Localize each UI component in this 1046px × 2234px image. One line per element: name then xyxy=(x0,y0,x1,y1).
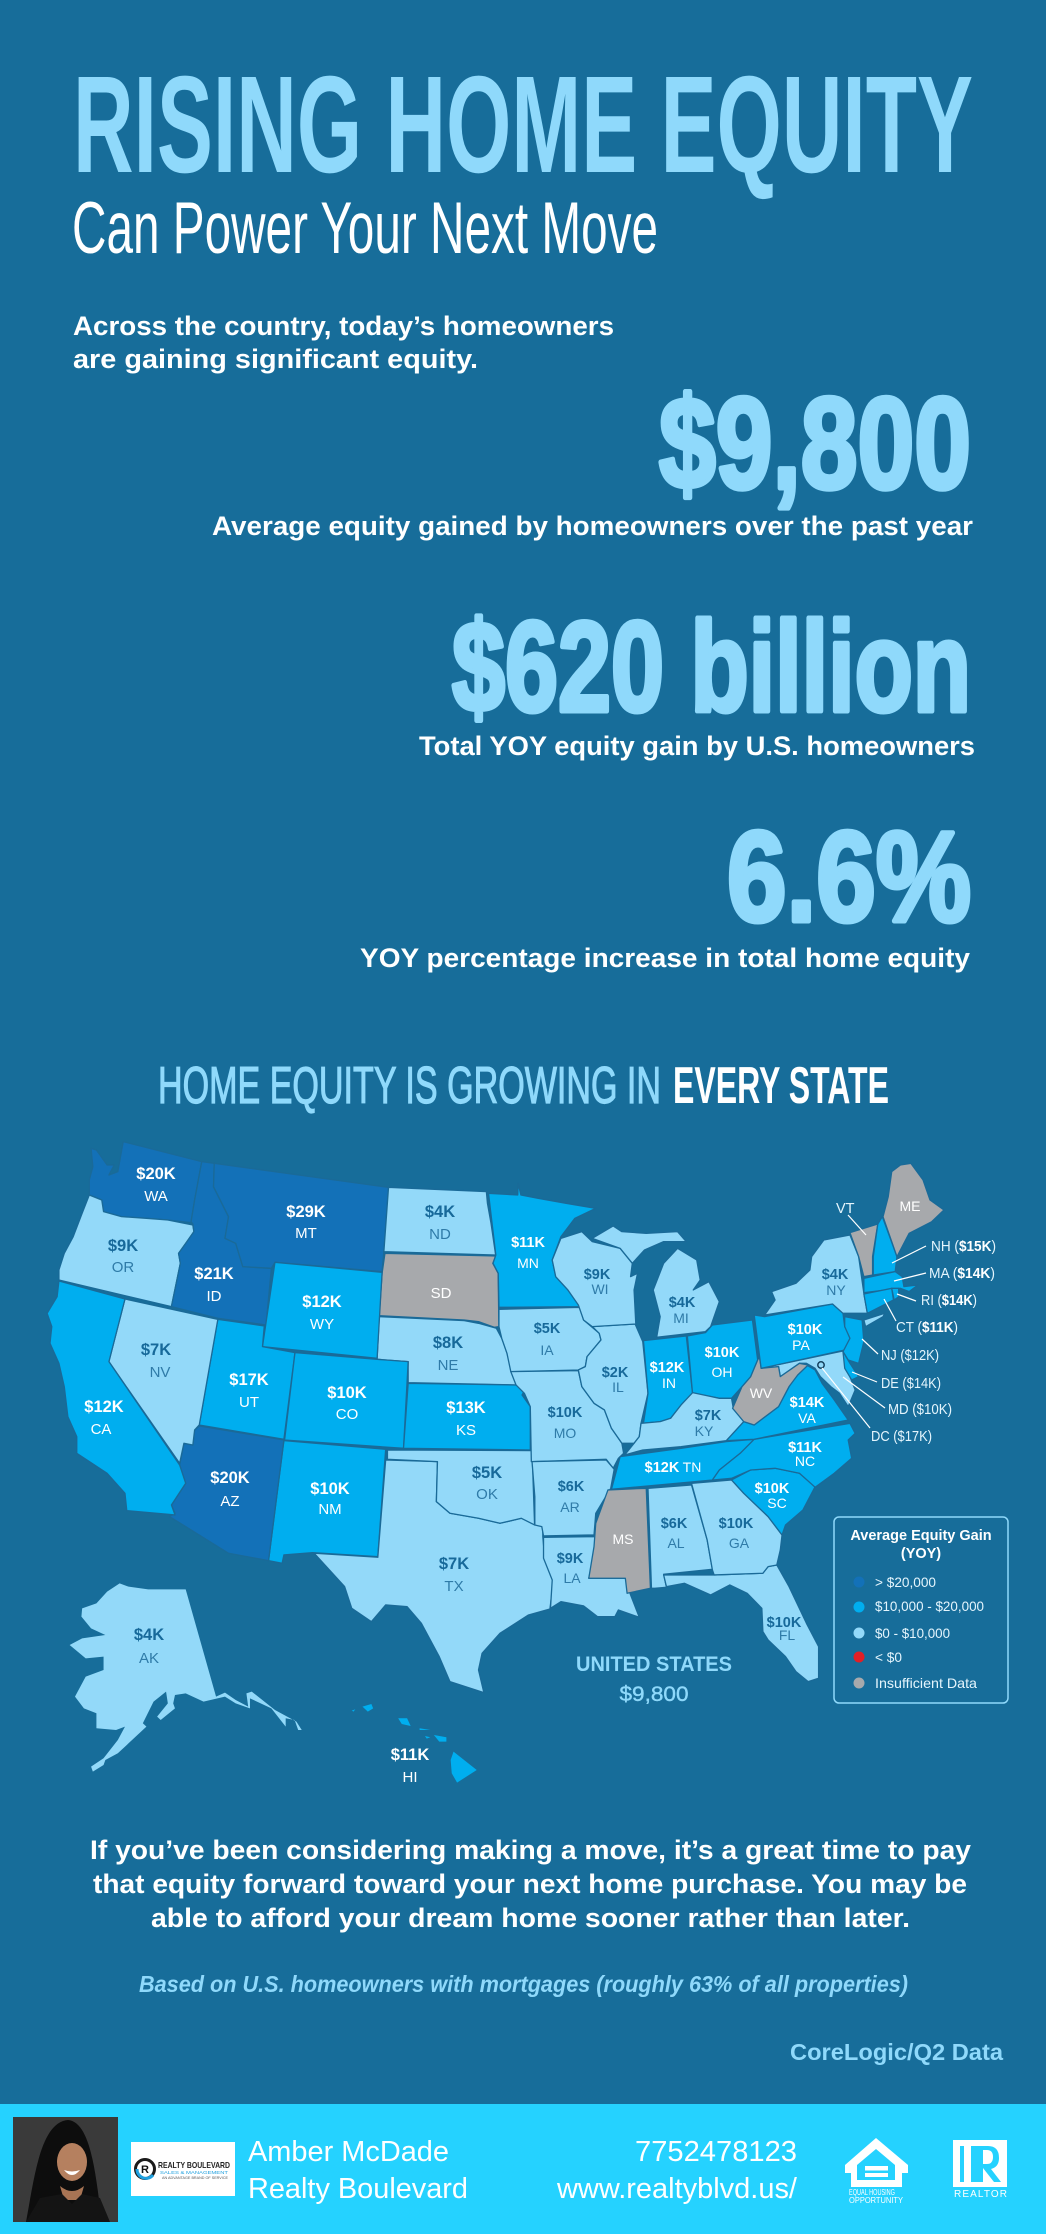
state: VA xyxy=(726,1365,848,1441)
state: WV xyxy=(733,1357,808,1425)
state: MT xyxy=(214,1163,389,1272)
state: AK: AK xyxy=(139,1650,159,1667)
state: OH: OH xyxy=(712,1364,732,1380)
Northeast callout leaders and labels xyxy=(822,1201,996,1445)
source: CoreLogic/Q2 Data xyxy=(790,2039,1003,2065)
agent name and company: Amber McDade xyxy=(248,2136,449,2168)
agent name and company xyxy=(248,2136,468,2205)
state: NE: NE xyxy=(438,1357,458,1374)
phone and website xyxy=(556,2136,798,2205)
Northeast callout leaders and labels: NH ($15K) xyxy=(931,1239,996,1255)
legend: < $0 xyxy=(875,1649,902,1665)
state: AL: AL xyxy=(667,1535,685,1551)
Northeast callout leaders and labels: DE ($14K) xyxy=(881,1376,941,1392)
Northeast callout leaders and labels: CT ($11K) xyxy=(896,1320,958,1336)
state: TN xyxy=(611,1439,754,1489)
state: LA xyxy=(544,1537,639,1617)
state: CA: $12K xyxy=(84,1398,124,1416)
state: NM xyxy=(269,1441,386,1563)
state: MO: $10K xyxy=(548,1405,583,1421)
state: SD xyxy=(379,1253,499,1327)
Northeast callout leaders and labels: NJ ($12K) xyxy=(881,1348,939,1364)
state: WA xyxy=(89,1142,202,1223)
state: UT xyxy=(199,1319,295,1439)
state: TX: $7K xyxy=(439,1555,469,1573)
state: AK xyxy=(70,1583,302,1772)
state: PA: PA xyxy=(792,1337,810,1353)
state: OK: $5K xyxy=(472,1464,502,1482)
state: MA xyxy=(864,1272,918,1293)
state: NH xyxy=(873,1217,897,1275)
state: IN: IN xyxy=(662,1375,676,1391)
state: NY: NY xyxy=(826,1282,846,1298)
state: FL: $10K xyxy=(767,1615,802,1631)
state: NE: $8K xyxy=(433,1334,463,1352)
state: MI xyxy=(592,1226,719,1337)
Northeast callout leaders and labels: MD ($10K) xyxy=(888,1402,952,1418)
state: AL xyxy=(648,1485,712,1588)
US choropleth map xyxy=(47,1142,996,1786)
state: SC: $10K xyxy=(755,1481,790,1497)
state: ND: $4K xyxy=(425,1203,455,1221)
national total: $9,800 xyxy=(620,1683,688,1706)
state: HI: HI xyxy=(402,1769,418,1786)
state: TN: TN xyxy=(683,1459,701,1475)
state: IL xyxy=(578,1324,648,1443)
closing paragraph: that equity forward toward your next home purchase. You may be xyxy=(93,1869,967,1899)
state: SD: SD xyxy=(431,1285,452,1302)
state: KS: $13K xyxy=(446,1399,486,1417)
state: MO: MO xyxy=(554,1425,576,1441)
company logo: REALTY BOULEVARD xyxy=(158,2160,230,2170)
map heading: HOME EQUITY IS GROWING IN xyxy=(158,1057,661,1115)
icon: realtor R xyxy=(953,2140,1007,2200)
map heading: EVERY STATE xyxy=(673,1057,889,1115)
state: MD xyxy=(761,1351,855,1407)
state: OK: OK xyxy=(476,1486,498,1503)
state: WY xyxy=(262,1262,382,1358)
intro text: Across the country, today’s homeowners xyxy=(73,311,614,341)
state: AR: $6K xyxy=(558,1479,585,1495)
icon: equal housing opportunity: OPPORTUNITY xyxy=(849,2196,904,2205)
state: OR xyxy=(59,1195,194,1307)
state: KY: $7K xyxy=(695,1408,722,1424)
icon: realtor R: REALTOR xyxy=(954,2189,1007,2200)
state: IN xyxy=(643,1336,693,1423)
state: IA: $5K xyxy=(534,1321,561,1337)
state: NC: $11K xyxy=(788,1440,822,1456)
legend: > $20,000 xyxy=(875,1574,936,1590)
state: NY: $4K xyxy=(822,1267,849,1283)
state: AZ: $20K xyxy=(210,1469,250,1487)
state: HI: $11K xyxy=(391,1746,429,1764)
state: MN: MN xyxy=(517,1255,539,1271)
stat: $9,800: $9,800 xyxy=(659,370,971,516)
state: FL xyxy=(664,1565,819,1682)
state: OH xyxy=(687,1320,758,1398)
state: MI: $4K xyxy=(669,1295,696,1311)
company logo: SALES & MANAGEMENT xyxy=(160,2170,228,2175)
state: UT: $17K xyxy=(229,1371,269,1389)
state: NM: $10K xyxy=(310,1480,350,1498)
DC marker xyxy=(818,1362,824,1368)
state: ME xyxy=(883,1163,944,1257)
state: CT xyxy=(864,1288,893,1313)
state: IA xyxy=(499,1307,601,1372)
company logo xyxy=(131,2142,235,2196)
legend: (YOY) xyxy=(901,1546,941,1562)
state: WI: $9K xyxy=(584,1267,611,1283)
stat: $620 billion: Total YOY equity gain by U.S. homeowners xyxy=(419,731,975,761)
state: WI xyxy=(552,1232,638,1327)
national total xyxy=(576,1653,732,1706)
state: GA xyxy=(692,1480,782,1575)
stat: $9,800 xyxy=(212,370,974,541)
state: OR: $9K xyxy=(108,1237,138,1255)
state: FL: FL xyxy=(779,1627,795,1643)
state: NV xyxy=(109,1299,218,1463)
state: KS: KS xyxy=(456,1422,476,1439)
state: MT: $29K xyxy=(286,1203,326,1221)
state: RI xyxy=(892,1288,899,1300)
state: CA: CA xyxy=(91,1421,111,1438)
state: CO: $10K xyxy=(327,1384,367,1402)
state: MI: MI xyxy=(673,1310,689,1326)
state: SC: SC xyxy=(767,1495,787,1511)
Northeast callout leaders and labels: DC ($17K) xyxy=(871,1429,932,1445)
Northeast callout leaders and labels: RI ($14K) xyxy=(921,1293,977,1309)
state: DE xyxy=(843,1352,859,1380)
state: WA: $20K xyxy=(136,1165,176,1183)
state: ID: $21K xyxy=(194,1265,234,1283)
state: VA: VA xyxy=(798,1410,816,1426)
state: AR: AR xyxy=(560,1499,580,1515)
state: MN: $11K xyxy=(511,1235,545,1251)
stat: 6.6%: 6.6% xyxy=(727,806,971,949)
stat: 6.6%: YOY percentage increase in total home equity xyxy=(360,943,970,973)
agent name and company: Realty Boulevard xyxy=(248,2173,468,2205)
state: MN xyxy=(489,1183,596,1307)
state: VT xyxy=(850,1224,878,1277)
state: SC xyxy=(732,1468,815,1535)
intro text xyxy=(73,311,614,374)
state: GA: GA xyxy=(729,1535,750,1551)
closing paragraph xyxy=(90,1835,971,1933)
company logo: AN ADVANTAGE BRAND OF SERVICE xyxy=(162,2176,229,2180)
phone and website: www.realtyblvd.us/ xyxy=(556,2173,798,2205)
state: AK: $4K xyxy=(134,1626,164,1644)
state: OR: OR xyxy=(112,1259,134,1276)
state: LA: LA xyxy=(563,1570,581,1586)
state: CA xyxy=(47,1281,186,1515)
state: OK xyxy=(387,1450,535,1525)
agent photo xyxy=(13,2117,118,2222)
state: KY xyxy=(625,1393,744,1455)
state: ME: ME xyxy=(900,1198,920,1214)
state: NC xyxy=(712,1423,855,1487)
legend: $10,000 - $20,000 xyxy=(875,1598,984,1614)
state: MS xyxy=(589,1488,650,1593)
state: KS xyxy=(404,1383,530,1450)
state: NC: NC xyxy=(795,1453,815,1469)
phone and website: 7752478123 xyxy=(635,2136,797,2168)
state: UT: UT xyxy=(239,1394,259,1411)
closing paragraph: If you’ve been considering making a move, it’s a great time to pay xyxy=(90,1835,971,1865)
icon: equal housing opportunity: EQUAL HOUSING xyxy=(849,2188,895,2197)
state: LA: $9K xyxy=(557,1551,584,1567)
state: IL: IL xyxy=(612,1379,624,1395)
subtitle: Can Power Your Next Move xyxy=(72,188,658,269)
company logo: R xyxy=(141,2164,149,2176)
state: VA: $14K xyxy=(790,1395,825,1411)
state: NE xyxy=(377,1317,516,1385)
state: NM: NM xyxy=(318,1501,342,1518)
state: NY xyxy=(765,1235,885,1327)
state: AZ xyxy=(170,1426,284,1561)
intro text: are gaining significant equity. xyxy=(73,344,478,374)
state: ID: ID xyxy=(206,1288,222,1305)
closing paragraph: able to afford your dream home sooner rather than later. xyxy=(151,1903,910,1933)
stat: $9,800: Average equity gained by homeowners over the past year xyxy=(212,511,974,541)
stat: 6.6% xyxy=(360,806,971,973)
legend: Insufficient Data xyxy=(875,1675,977,1691)
footnote: Based on U.S. homeowners with mortgages (roughly 63% of all properties) xyxy=(139,1971,908,1997)
state: WV: WV xyxy=(750,1385,773,1401)
state: CO: CO xyxy=(336,1406,358,1423)
legend xyxy=(834,1517,1008,1703)
state: IA: IA xyxy=(540,1342,554,1358)
state: MT: MT xyxy=(295,1225,317,1242)
state: HI xyxy=(352,1704,477,1786)
state: KY: KY xyxy=(695,1423,714,1439)
state: IN: $12K xyxy=(650,1360,685,1376)
state: WY: $12K xyxy=(302,1293,342,1311)
legend: $0 - $10,000 xyxy=(875,1625,950,1641)
state: NV: NV xyxy=(150,1364,170,1381)
state: OH: $10K xyxy=(705,1345,740,1361)
icon: equal housing opportunity xyxy=(845,2138,908,2205)
state: PA: $10K xyxy=(788,1322,823,1338)
legend: Average Equity Gain xyxy=(850,1528,992,1544)
state: ID xyxy=(171,1162,271,1325)
state: WI: WI xyxy=(591,1281,609,1297)
state: TN: $12K xyxy=(645,1460,680,1476)
state: NJ xyxy=(843,1317,864,1363)
state: AL: $6K xyxy=(661,1516,688,1532)
state: AR xyxy=(532,1460,614,1536)
state: CO xyxy=(285,1353,408,1448)
state: ND: ND xyxy=(429,1226,451,1243)
Northeast callout leaders and labels: VT xyxy=(836,1201,855,1217)
state: PA xyxy=(754,1304,852,1368)
state: IL: $2K xyxy=(602,1365,629,1381)
state: ND xyxy=(384,1187,496,1255)
state: GA: $10K xyxy=(719,1516,754,1532)
state: WA: WA xyxy=(144,1188,168,1205)
state: WY: WY xyxy=(310,1316,334,1333)
state: MS: MS xyxy=(612,1531,634,1547)
footer band xyxy=(0,2104,1046,2234)
state: TX xyxy=(314,1460,554,1693)
national total: UNITED STATES xyxy=(576,1653,732,1676)
Northeast callout leaders and labels: MA ($14K) xyxy=(929,1266,995,1282)
state: TX: TX xyxy=(444,1578,464,1595)
state: MO xyxy=(511,1371,624,1468)
state: AZ: AZ xyxy=(220,1493,240,1510)
state: NV: $7K xyxy=(141,1341,171,1359)
